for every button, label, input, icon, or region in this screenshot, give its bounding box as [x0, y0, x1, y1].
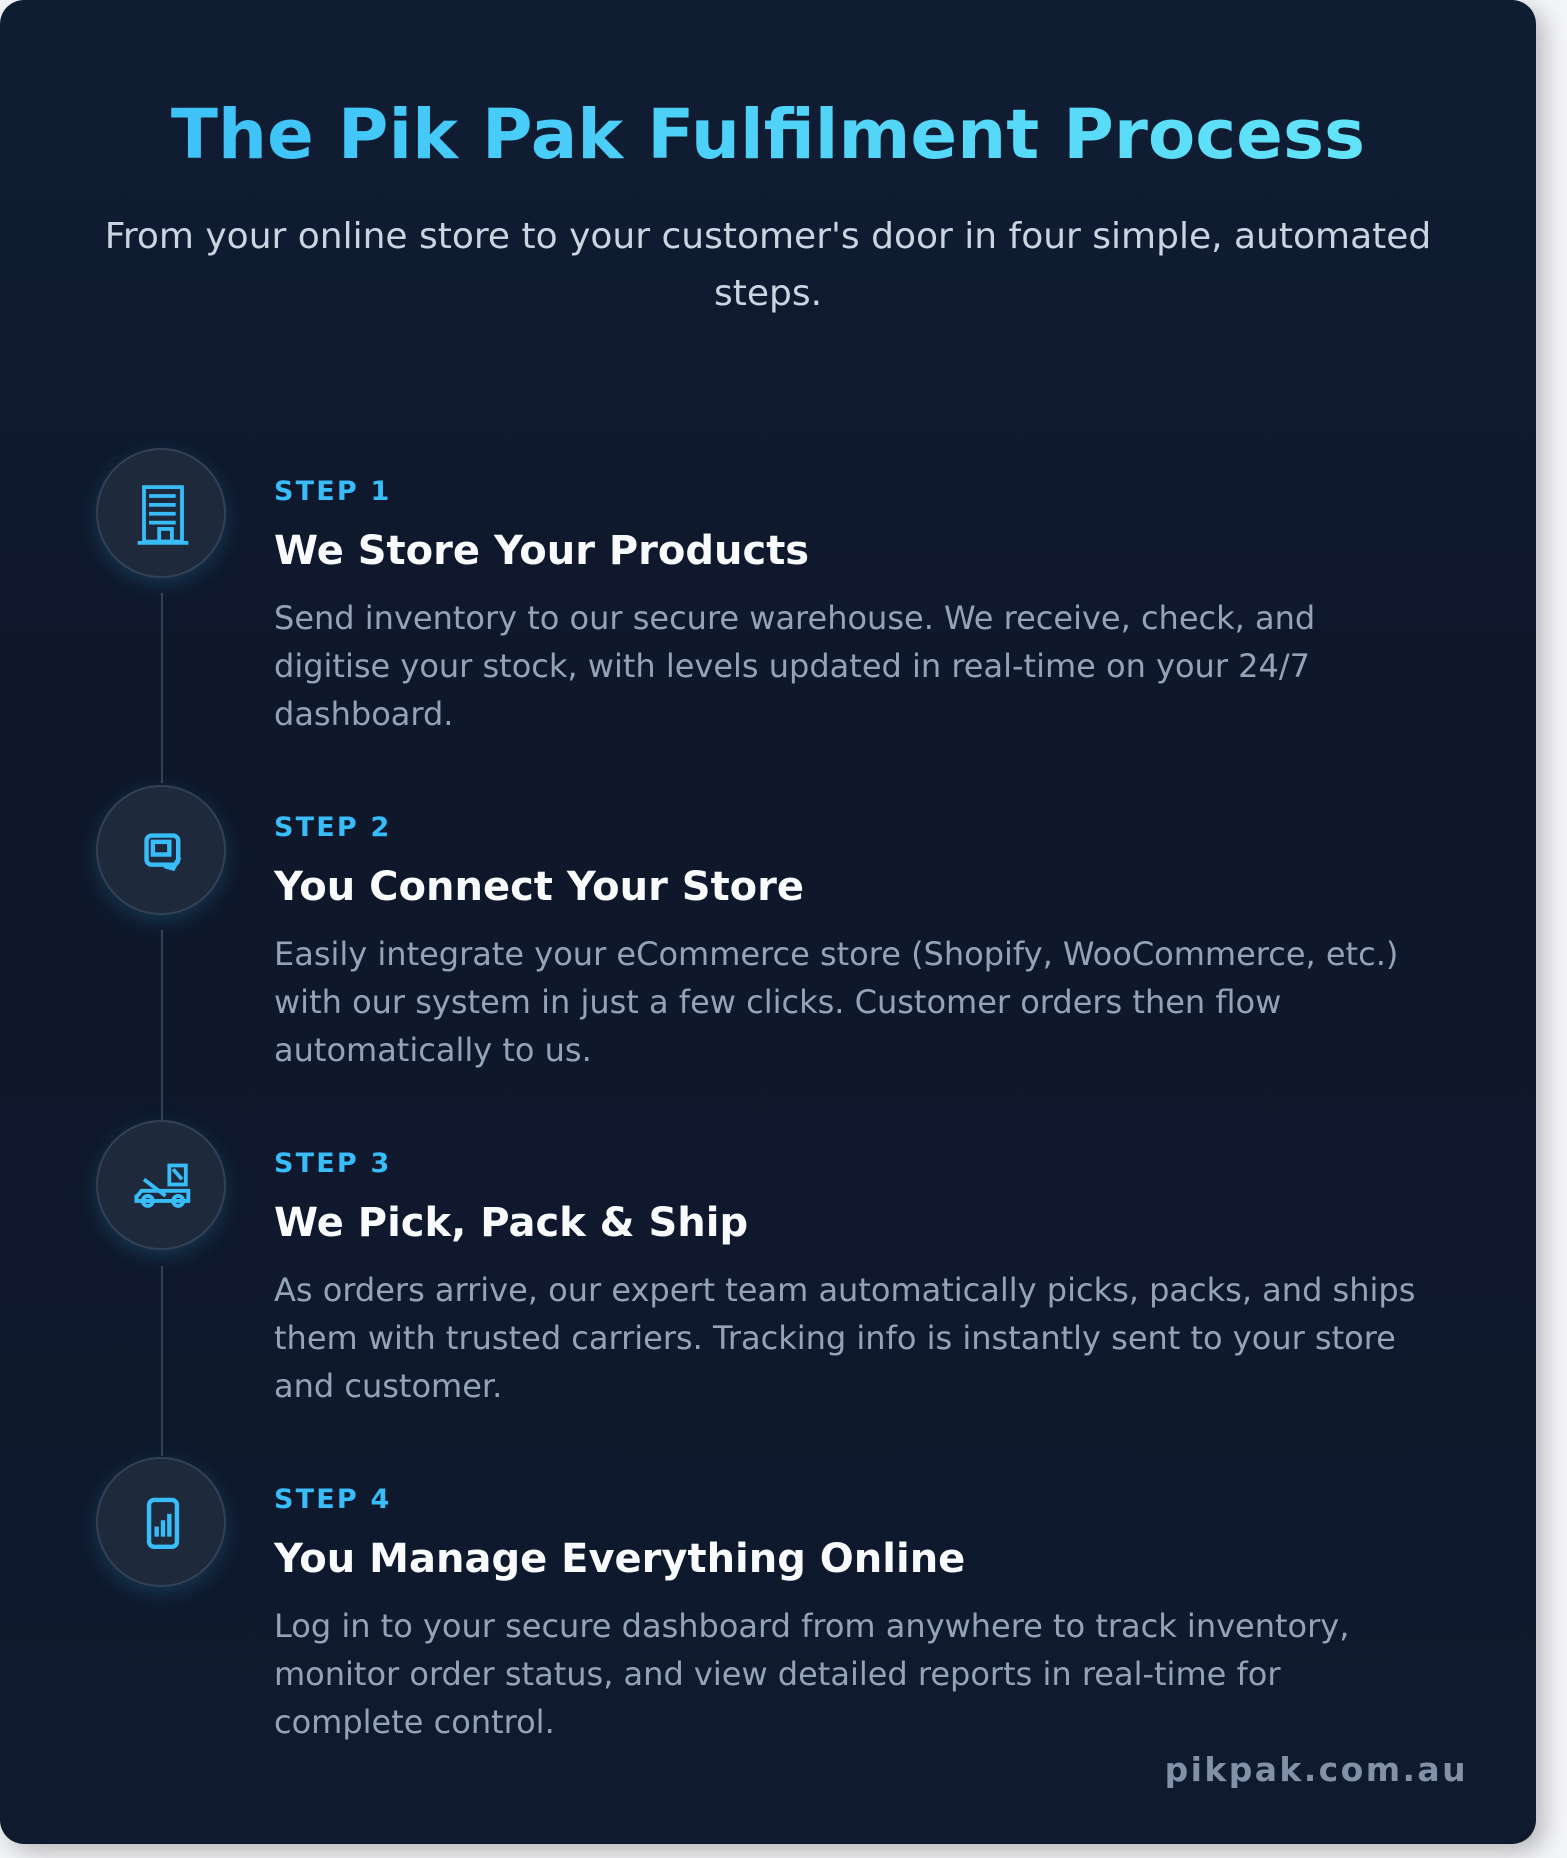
step 3: We Pick, Pack & Ship	[274, 1200, 748, 1246]
step 3: STEP 3	[274, 1148, 391, 1179]
icon: connect	[96, 785, 226, 915]
step 4: complete control.	[274, 1703, 555, 1741]
icon: dashboard	[96, 1457, 226, 1587]
step 2	[274, 812, 1398, 1069]
step 2: You Connect Your Store	[274, 864, 804, 910]
step 2: automatically to us.	[274, 1031, 592, 1069]
step 4: You Manage Everything Online	[274, 1536, 965, 1582]
step 1: dashboard.	[274, 695, 453, 733]
step 4: STEP 4	[274, 1484, 391, 1515]
step 1: digitise your stock, with levels updated in real-time on your 24/7	[274, 647, 1310, 685]
step 2: with our system in just a few clicks. Customer orders then flow	[274, 983, 1281, 1021]
footer url: pikpak.com.au	[1165, 1750, 1468, 1789]
icon: warehouse	[96, 448, 226, 578]
step 1: Send inventory to our secure warehouse. We receive, check, and	[274, 599, 1315, 637]
step 3	[274, 1148, 1415, 1405]
step 2: Easily integrate your eCommerce store (Shopify, WooCommerce, etc.)	[274, 935, 1398, 973]
icon: truck	[96, 1120, 226, 1250]
step 4	[274, 1484, 1349, 1741]
step 3: As orders arrive, our expert team automatically picks, packs, and ships	[274, 1271, 1415, 1309]
title	[0, 90, 1536, 180]
step 1: STEP 1	[274, 476, 391, 507]
step 4: Log in to your secure dashboard from anywhere to track inventory,	[274, 1607, 1349, 1645]
step 3: them with trusted carriers. Tracking info is instantly sent to your store	[274, 1319, 1396, 1357]
step 4: monitor order status, and view detailed reports in real-time for	[274, 1655, 1280, 1693]
step 1	[274, 476, 1315, 733]
step 1: We Store Your Products	[274, 528, 809, 574]
step 3: and customer.	[274, 1367, 502, 1405]
step 2: STEP 2	[274, 812, 391, 843]
subtitle: From your online store to your customer's door in four simple, automated steps.	[105, 216, 1431, 314]
title: The Pik Pak Fulfilment Process	[171, 95, 1365, 175]
